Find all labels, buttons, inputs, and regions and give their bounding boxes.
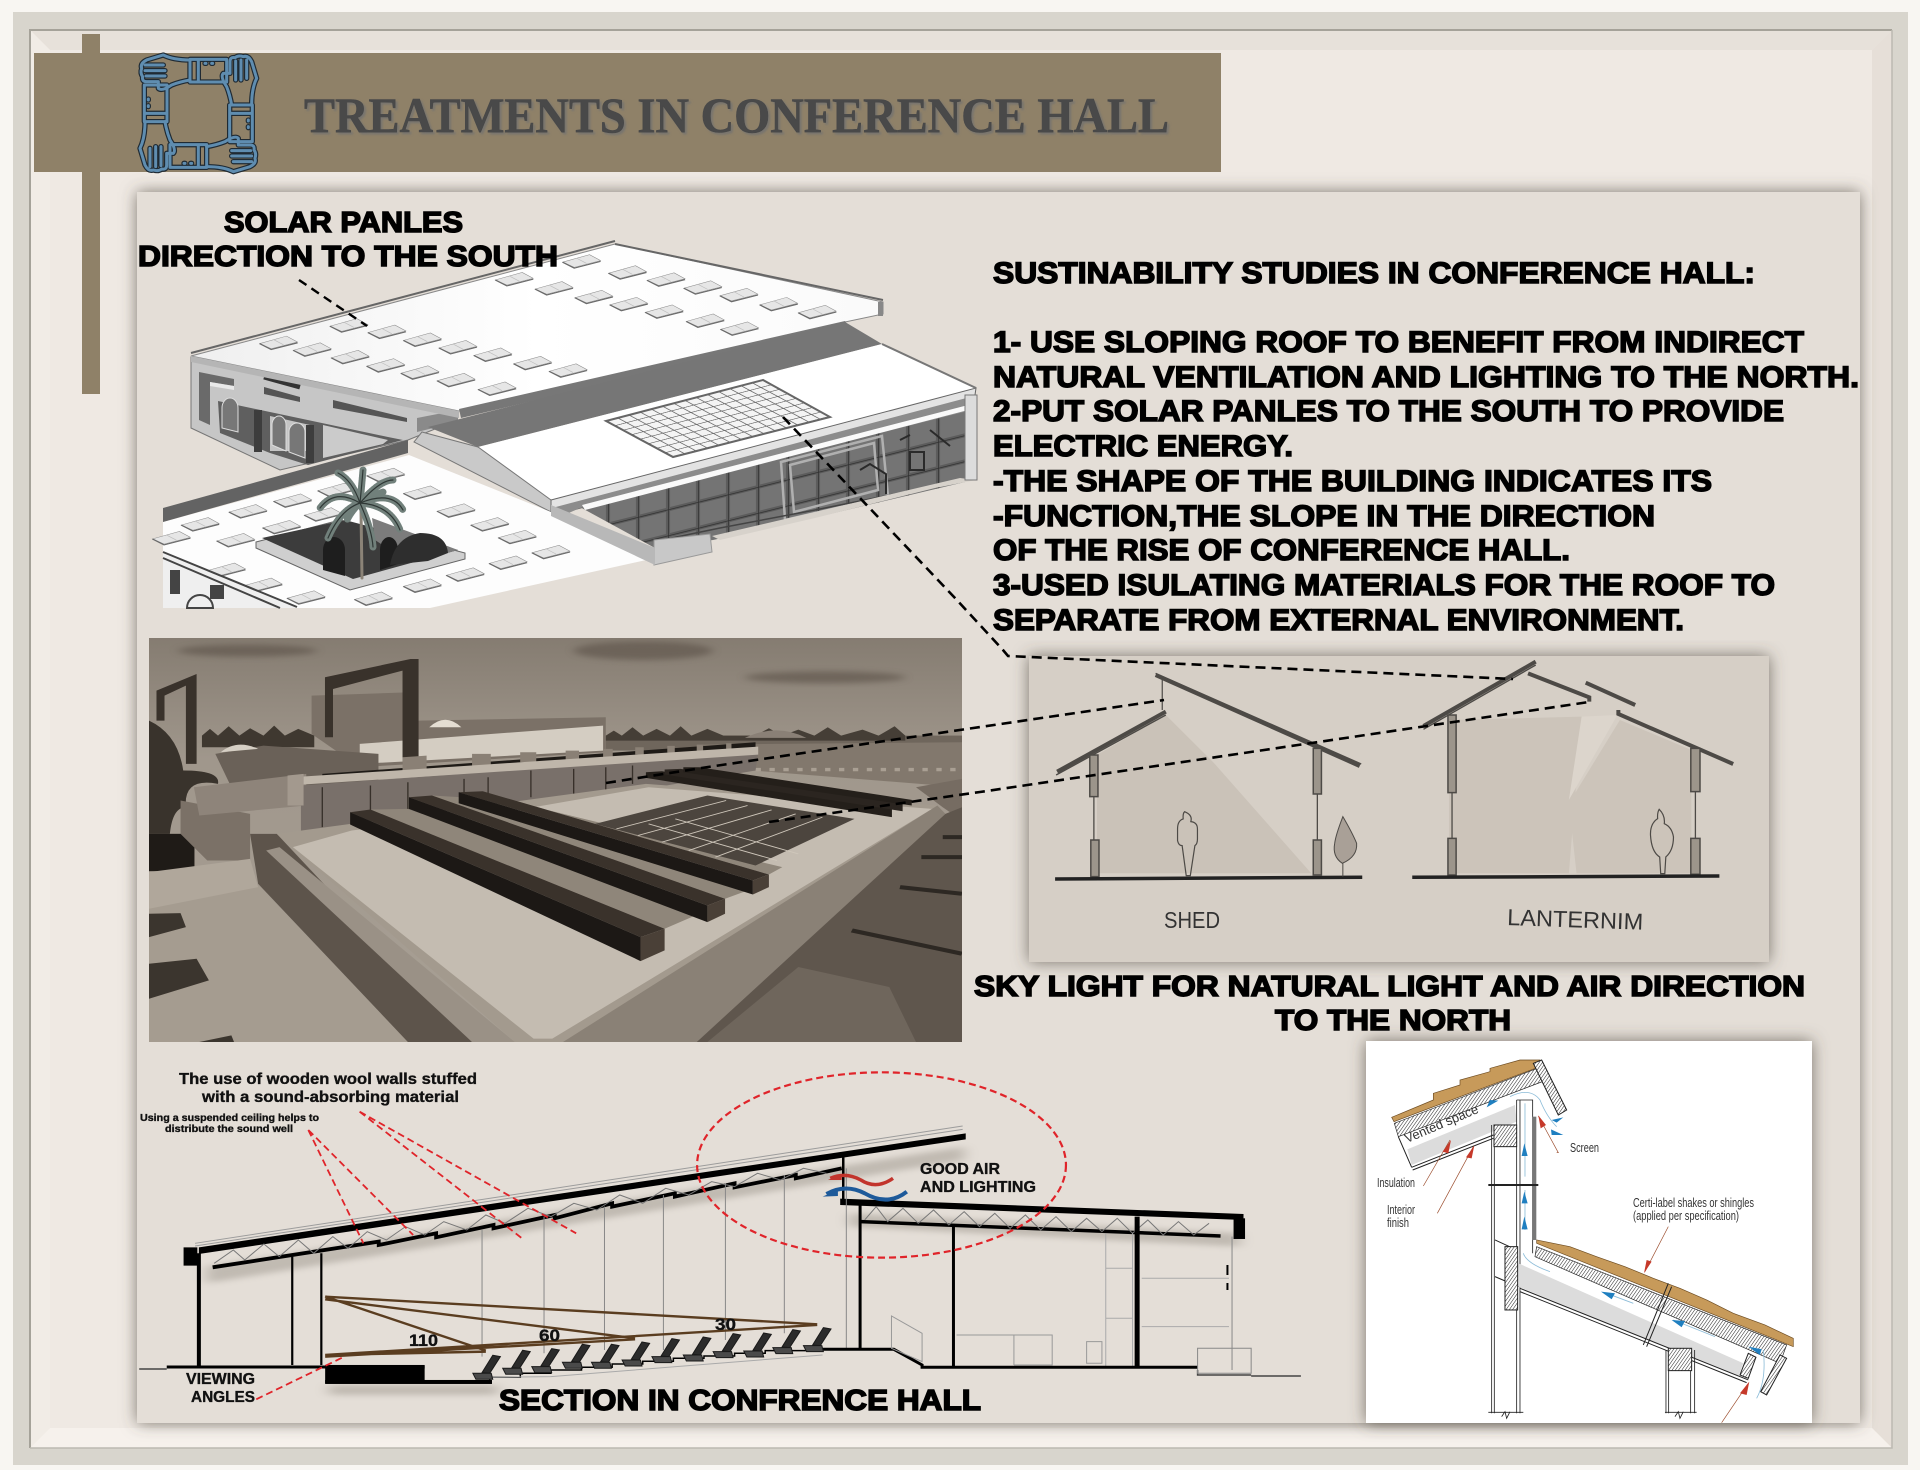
terrace roof and courtyard — [152, 440, 655, 608]
main sloped roof — [184, 1126, 966, 1267]
lower flat roof — [840, 1199, 1245, 1239]
hall section drawing — [139, 1071, 1301, 1417]
label: solar panels direction — [138, 207, 558, 273]
detail labels: (applied per specification) — [1633, 1208, 1739, 1223]
sky — [149, 638, 962, 1042]
sustainability studies text block: 2-PUT SOLAR PANLES TO THE SOUTH TO PROVIDE — [993, 395, 1784, 428]
label: shed: SHED — [1164, 907, 1220, 933]
detail labels: Vented space — [1402, 1101, 1481, 1146]
airflow arrows — [1487, 1092, 1764, 1398]
glazed front elevation — [578, 410, 976, 565]
callout: viewing angles: ANGLES — [191, 1389, 255, 1406]
hall glazing and roof band — [288, 742, 758, 834]
soft drawing shadows — [207, 1147, 1240, 1395]
red dashed callouts — [256, 1072, 1066, 1399]
callout: suspended ceiling: Using a suspended ceiling helps to — [140, 1112, 319, 1124]
skylight glazing — [595, 796, 854, 865]
sustainability studies text block: -FUNCTION,THE SLOPE IN THE DIRECTION — [993, 500, 1655, 533]
sustainability studies text block: SEPARATE FROM EXTERNAL ENVIRONMENT. — [993, 604, 1684, 637]
callout: wooden wool walls — [179, 1071, 477, 1106]
sustainability studies text block: SUSTINABILITY STUDIES IN CONFERENCE HALL: — [993, 257, 1755, 290]
sustainability studies text block: ELECTRIC ENERGY. — [993, 430, 1293, 463]
callout: good air and lighting: GOOD AIR — [920, 1161, 1000, 1178]
sustainability studies text block — [993, 257, 1859, 637]
lanternim — [1412, 662, 1733, 877]
left facade wall — [191, 357, 458, 470]
sustainability studies text block: -THE SHAPE OF THE BUILDING INDICATES ITS — [993, 465, 1712, 498]
section caption: SECTION IN CONFRENCE HALL — [499, 1385, 981, 1417]
isometric building view — [152, 241, 977, 608]
viewing angle values: 60 — [539, 1326, 560, 1345]
sepia roof render — [149, 638, 962, 1042]
icon: four interlocked hands — [140, 55, 257, 172]
label: solar panels direction: SOLAR PANLES — [224, 207, 463, 239]
auditorium seats — [473, 1328, 831, 1379]
callout: suspended ceiling — [140, 1112, 319, 1135]
sky light caption — [974, 971, 1805, 1037]
sustainability studies text block: OF THE RISE OF CONFERENCE HALL. — [993, 534, 1570, 567]
detail labels — [1377, 1101, 1754, 1230]
label: solar panels direction: DIRECTION TO THE SOUTH — [138, 241, 558, 273]
callout: wooden wool walls: The use of wooden wool walls stuffed — [179, 1071, 477, 1088]
floors and seating rake — [139, 1316, 1301, 1384]
detail labels: Screen — [1570, 1140, 1599, 1155]
pointer lines — [1423, 1115, 1749, 1423]
detail labels: Interior — [1387, 1202, 1415, 1217]
title banner — [34, 53, 1221, 172]
vertical accent bar — [82, 34, 100, 394]
callout: viewing angles: VIEWING — [186, 1371, 255, 1388]
callout: good air and lighting — [920, 1161, 1036, 1196]
viewing angle lines — [325, 1297, 817, 1357]
sky light caption: TO THE NORTH — [1275, 1005, 1511, 1037]
shadowed clerestory band — [428, 322, 882, 447]
skylight sketch photo — [1029, 656, 1769, 962]
dashed leader: solar panels — [299, 280, 367, 326]
sustainability studies text block: 1- USE SLOPING ROOF TO BENEFIT FROM INDIRECT — [993, 326, 1804, 359]
walls — [1488, 1100, 1538, 1418]
air flow arrows — [823, 1174, 907, 1200]
callout: viewing angles — [186, 1371, 255, 1406]
viewing angle values — [409, 1315, 736, 1350]
left palms and stairs — [149, 721, 306, 871]
shed and lanternim sections — [1055, 662, 1733, 879]
palm tree — [320, 470, 403, 578]
viewing angle values: 30 — [715, 1315, 736, 1334]
callout: good air and lighting: AND LIGHTING — [920, 1179, 1036, 1196]
portal frames — [156, 659, 419, 764]
detail labels: finish — [1387, 1215, 1409, 1230]
beams — [350, 767, 912, 961]
viewing angle values: 110 — [409, 1331, 438, 1350]
label: lanternim: LANTERNIM — [1507, 904, 1644, 935]
sustainability studies text block: NATURAL VENTILATION AND LIGHTING TO THE NORTH. — [993, 361, 1859, 394]
shed — [1055, 673, 1362, 879]
sky light caption: SKY LIGHT FOR NATURAL LIGHT AND AIR DIRECTION — [974, 971, 1805, 1003]
sustainability studies text block: 3-USED ISULATING MATERIALS FOR THE ROOF TO — [993, 569, 1775, 602]
dashed leaders to the sketch — [606, 417, 1589, 822]
lower roof — [1495, 1240, 1793, 1418]
detail drawing — [1392, 1060, 1793, 1423]
columns and partitions — [199, 1157, 1232, 1370]
upper roof with solar panels — [191, 241, 883, 418]
title: TREATMENTS IN CONFERENCE HALL — [304, 87, 1169, 143]
detail labels: Insulation — [1377, 1175, 1415, 1190]
upper roof — [1392, 1060, 1567, 1170]
detail labels: Certi-label shakes or shingles — [1633, 1195, 1754, 1210]
lower roof with skylight — [414, 344, 977, 520]
callout: wooden wool walls: with a sound-absorbing material — [201, 1089, 459, 1106]
callout: suspended ceiling: distribute the sound well — [165, 1123, 293, 1135]
roof vent detail — [1366, 1041, 1812, 1423]
left floor, parapets and roof slab — [149, 784, 962, 1042]
horizon buildings and palms — [202, 692, 962, 821]
main panel — [137, 192, 1860, 1423]
